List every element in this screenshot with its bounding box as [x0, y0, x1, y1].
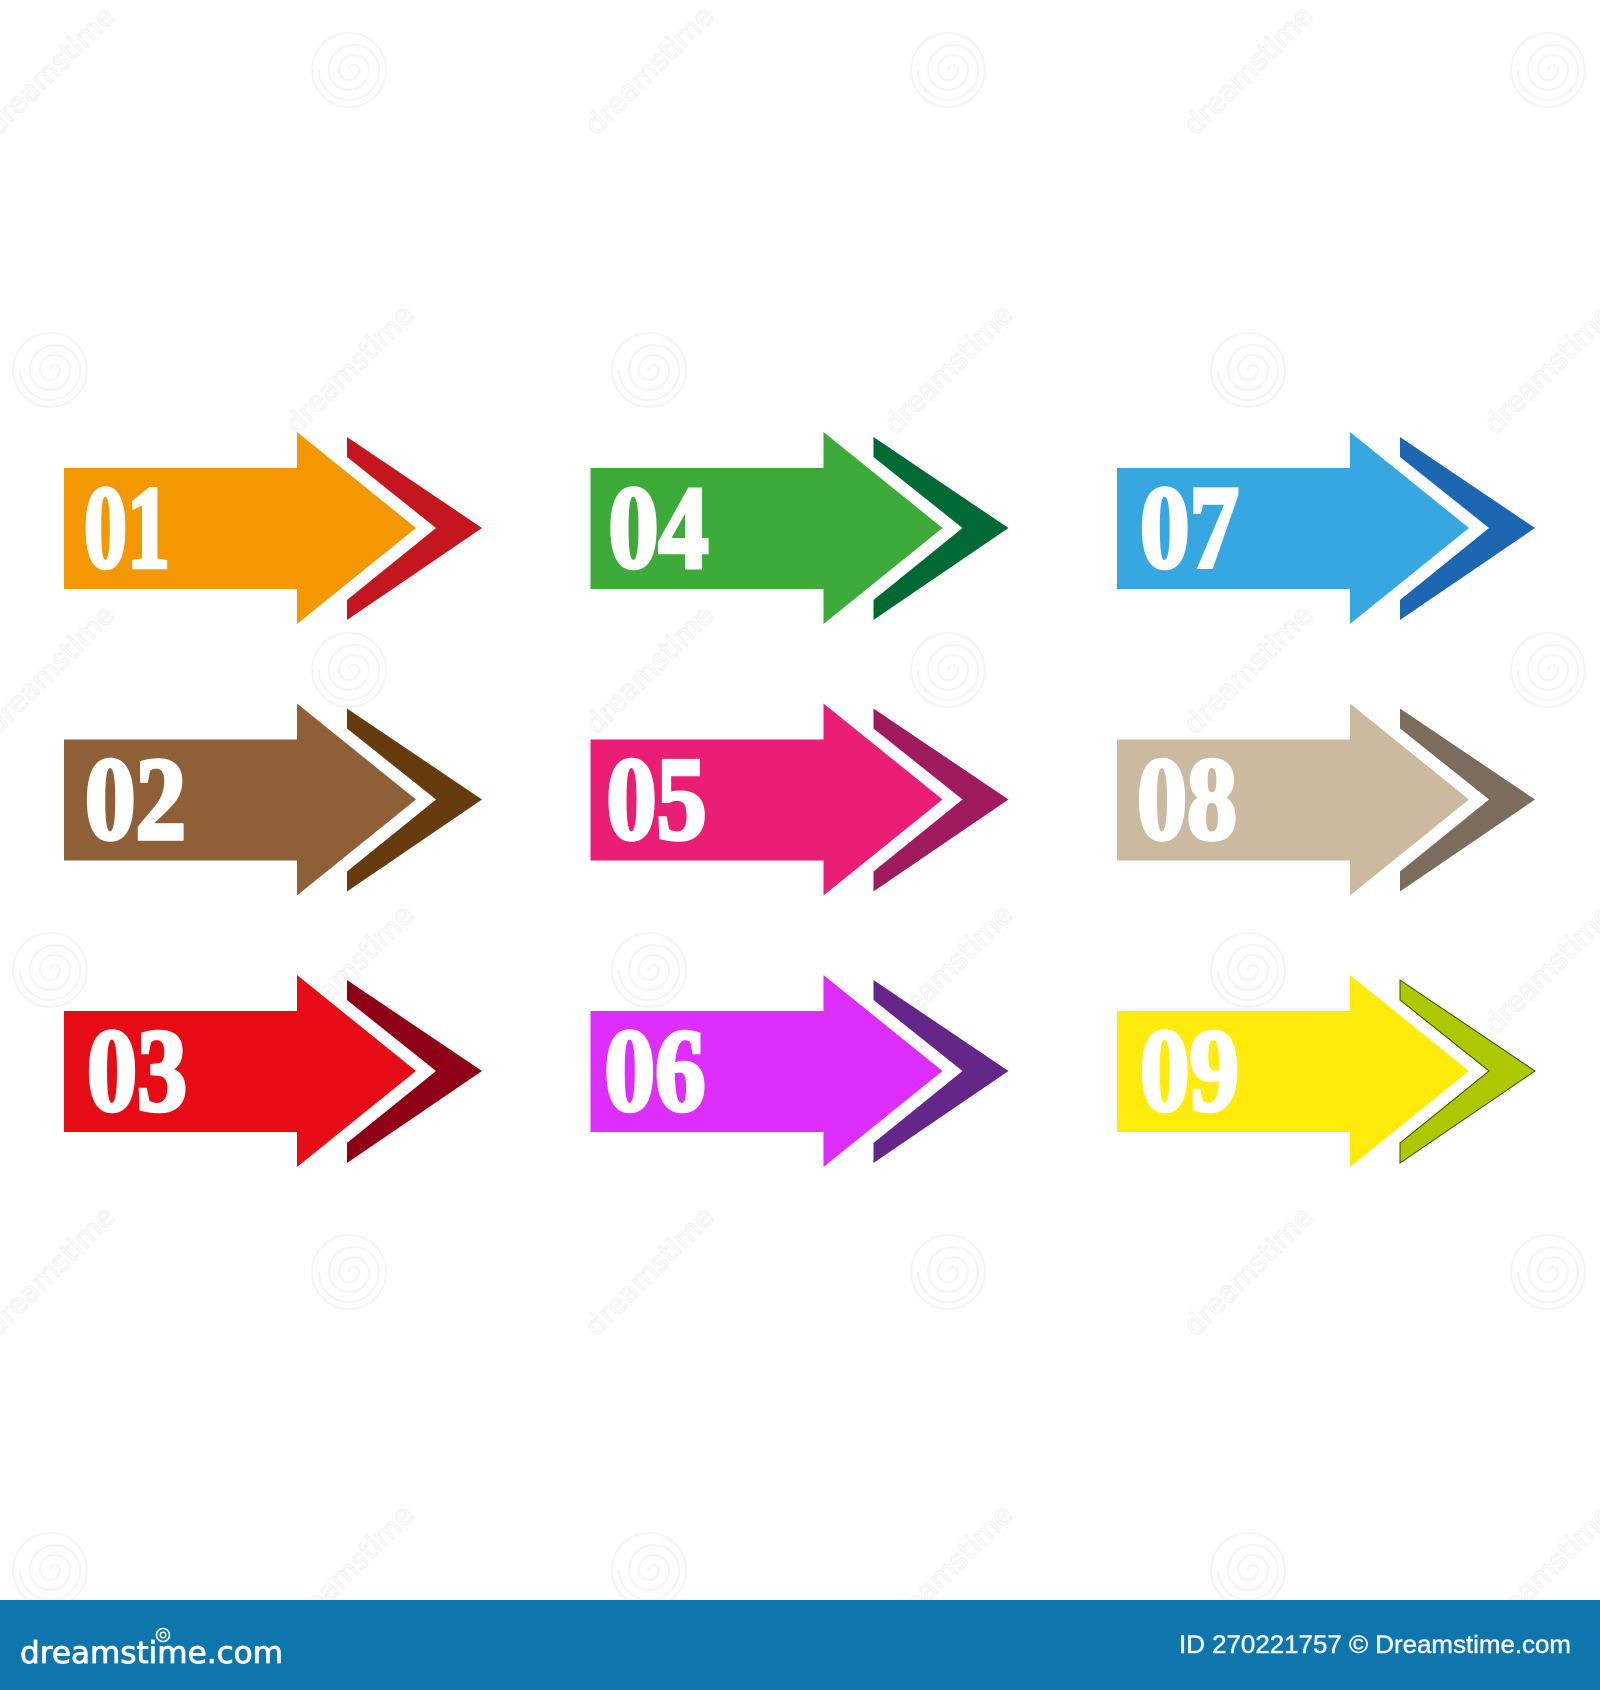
arrow body 07 [1117, 432, 1469, 624]
watermark pattern: dreamstime [1177, 1200, 1319, 1342]
arrow body 04 [590, 432, 942, 624]
footer bar [0, 1600, 1600, 1690]
number 01: 01 [84, 462, 170, 593]
watermark pattern: dreamstime [1177, 598, 1319, 740]
number 02: 02 [85, 734, 186, 864]
arrow 03 [64, 975, 482, 1167]
number 06: 06 [604, 1005, 706, 1136]
arrow 08 [1117, 704, 1535, 896]
chevron 06 [874, 980, 1008, 1163]
chevron 09 [1400, 980, 1535, 1163]
arrow body 08 [1117, 704, 1469, 896]
arrow 07 [1117, 432, 1535, 624]
chevron 04 [874, 437, 1008, 620]
chevron 02 [347, 708, 482, 892]
arrow 06 [590, 975, 1008, 1167]
arrow 04 [590, 432, 1008, 624]
arrow 05 [590, 704, 1008, 896]
number 09: 09 [1140, 1005, 1239, 1136]
watermark pattern: dreamstime [877, 898, 1019, 1040]
watermark pattern: dreamstime [1177, 0, 1319, 141]
watermark pattern: dreamstime [877, 298, 1019, 440]
chevron 08 [1400, 708, 1535, 892]
arrow body 09 [1117, 975, 1469, 1167]
watermark pattern: dreamstime [578, 0, 720, 141]
arrow body 06 [590, 975, 942, 1167]
arrow 09 [1117, 975, 1535, 1167]
watermark pattern: dreamstime [278, 1498, 420, 1640]
arrow body 03 [64, 975, 416, 1167]
number 03: 03 [87, 1005, 187, 1136]
chevron 03 [347, 980, 482, 1163]
number 08: 08 [1137, 734, 1237, 864]
number 04: 04 [608, 462, 708, 593]
arrow body 02 [64, 704, 416, 896]
arrow 01 [64, 432, 482, 624]
watermark pattern: dreamstime [578, 1200, 720, 1342]
number 07: 07 [1140, 462, 1239, 593]
watermark pattern: dreamstime [578, 598, 720, 740]
number 05: 05 [606, 734, 706, 864]
chevron 05 [874, 708, 1008, 892]
arrow 02 [64, 704, 482, 896]
watermark pattern: dreamstime [278, 898, 420, 1040]
watermark pattern: dreamstime [877, 1498, 1019, 1640]
watermark pattern: dreamstime [278, 298, 420, 440]
arrow body 01 [64, 432, 416, 624]
footer logo text: dreamstime.com [20, 1636, 283, 1671]
footer logo spiral [156, 1628, 170, 1642]
image id credit: ID 270221757 © Dreamstime.com [1179, 1631, 1571, 1659]
chevron 01 [347, 437, 482, 620]
chevron 07 [1400, 437, 1535, 620]
arrow body 05 [590, 704, 942, 896]
